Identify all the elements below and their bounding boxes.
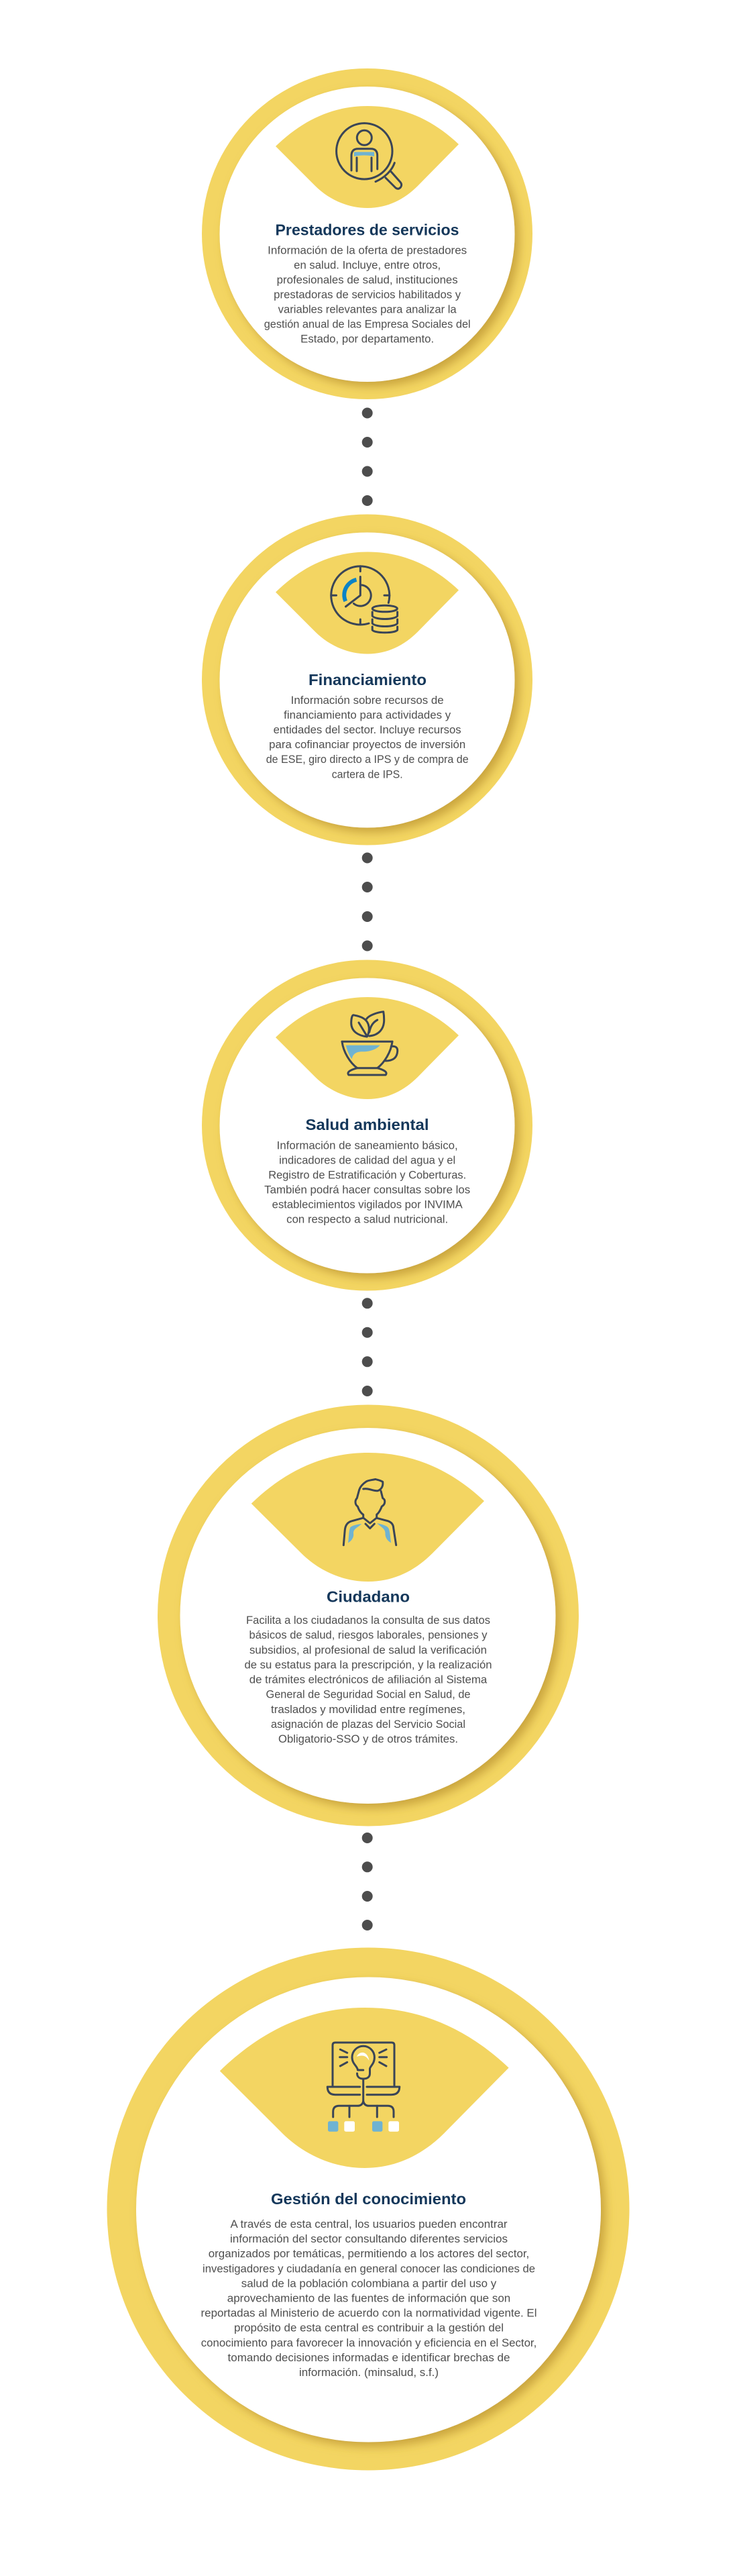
text block: Facilita a los ciudadanos la consulta de sus datos xyxy=(246,1614,490,1627)
icon: laptop with light bulb and network xyxy=(327,2043,400,2132)
text block: reportadas al Ministerio de acuerdo con la normatividad vigente. El xyxy=(201,2308,536,2320)
text block: Información de la oferta de prestadores xyxy=(268,244,467,256)
yellow eye shape xyxy=(276,997,459,1099)
inner white disc xyxy=(136,1977,601,2442)
icon: cup with leaves xyxy=(342,1012,398,1075)
connector dots 3 xyxy=(362,1298,373,1396)
icon: citizen portrait xyxy=(343,1479,396,1545)
text block: para cofinanciar proyectos de inversión xyxy=(269,739,465,751)
text block: Información de saneamiento básico, xyxy=(277,1139,458,1151)
text block: salud de la población colombiana a partir del uso y xyxy=(241,2277,497,2289)
ring xyxy=(202,960,532,1291)
text block: financiamiento para actividades y xyxy=(284,709,451,721)
text block: subsidios, al profesional de salud la verificación xyxy=(249,1644,487,1656)
text block xyxy=(264,1139,470,1225)
text block: A través de esta central, los usuarios pueden encontrar xyxy=(231,2218,508,2230)
text block: asignación de plazas del Servicio Social xyxy=(271,1718,465,1731)
icon: person under magnifier xyxy=(337,123,402,189)
yellow eye shape xyxy=(220,2008,509,2168)
panel: Ciudadano xyxy=(158,1405,579,1826)
text block xyxy=(201,2218,536,2379)
text block: prestadoras de servicios habilitados y xyxy=(274,289,461,301)
text block: información del sector consultando diferentes servicios xyxy=(230,2233,508,2245)
heading: Ciudadano xyxy=(327,1588,410,1606)
text block xyxy=(266,694,469,780)
text block: básicos de salud, riesgos laborales, pensiones y xyxy=(249,1629,488,1641)
ring xyxy=(202,68,532,399)
text block: Información sobre recursos de xyxy=(291,694,444,707)
text block: cartera de IPS. xyxy=(332,768,403,780)
text block: También podrá hacer consultas sobre los xyxy=(264,1184,470,1196)
text block: organizados por temáticas, permitiendo a los actores del sector, xyxy=(209,2248,529,2260)
ring xyxy=(158,1405,579,1826)
inner white disc xyxy=(220,533,515,828)
text block: información. (minsalud, s.f.) xyxy=(299,2367,439,2379)
text block: de ESE, giro directo a IPS y de compra de xyxy=(266,754,469,766)
connector dots 4 xyxy=(362,1833,373,1930)
text block xyxy=(244,1614,492,1745)
text block: investigadores y ciudadanía en general conocer las condiciones de xyxy=(203,2263,535,2275)
heading: Gestión del conocimiento xyxy=(271,2190,466,2208)
text block: conocimiento para favorecer la innovación y eficiencia en el Sector, xyxy=(201,2337,536,2349)
text block: variables relevantes para analizar la xyxy=(278,303,457,315)
inner white disc xyxy=(220,87,515,382)
text block: Obligatorio-SSO y de otros trámites. xyxy=(278,1733,458,1745)
panel: Financiamiento xyxy=(202,514,532,845)
text block xyxy=(264,244,471,345)
ring xyxy=(107,1947,629,2471)
text block: de trámites electrónicos de afiliación al Sistema xyxy=(249,1673,488,1686)
text block: propósito de esta central es contribuir a la gestión del xyxy=(234,2322,504,2334)
yellow eye shape xyxy=(276,106,459,208)
text block: tomando decisiones informadas e identificar brechas de xyxy=(228,2352,510,2364)
text block: con respecto a salud nutricional. xyxy=(286,1213,448,1225)
text block: de su estatus para la prescripción, y la realización xyxy=(244,1659,492,1671)
connector dots 1 xyxy=(362,408,373,506)
heading: Salud ambiental xyxy=(306,1116,429,1133)
text block: Registro de Estratificación y Coberturas. xyxy=(268,1169,466,1181)
heading: Prestadores de servicios xyxy=(275,221,459,239)
text block: establecimientos vigilados por INVIMA xyxy=(272,1198,463,1210)
connector dots 2 xyxy=(362,852,373,951)
text block: Estado, por departamento. xyxy=(300,333,434,345)
panel: Salud ambiental xyxy=(202,960,532,1291)
yellow eye shape xyxy=(251,1453,484,1582)
inner white disc xyxy=(180,1428,555,1804)
ring xyxy=(202,514,532,845)
inner white disc xyxy=(220,978,515,1274)
text block: traslados y movilidad entre regímenes, xyxy=(271,1704,465,1716)
panel: Prestadores de servicios xyxy=(202,68,532,399)
text block: gestión anual de las Empresa Sociales del xyxy=(264,318,471,330)
text block: entidades del sector. Incluye recursos xyxy=(274,724,461,736)
text block: en salud. Incluye, entre otros, xyxy=(294,259,441,271)
text block: indicadores de calidad del agua y el xyxy=(279,1154,455,1166)
heading: Financiamiento xyxy=(308,671,427,688)
text block: profesionales de salud, instituciones xyxy=(277,274,458,286)
text block: General de Seguridad Social en Salud, de xyxy=(266,1689,471,1701)
yellow eye shape xyxy=(276,552,459,654)
text block: aprovechamiento de las fuentes de información que son xyxy=(227,2292,510,2304)
panel: Gestión del conocimiento xyxy=(107,1947,629,2471)
icon: clock and coins xyxy=(331,566,398,633)
